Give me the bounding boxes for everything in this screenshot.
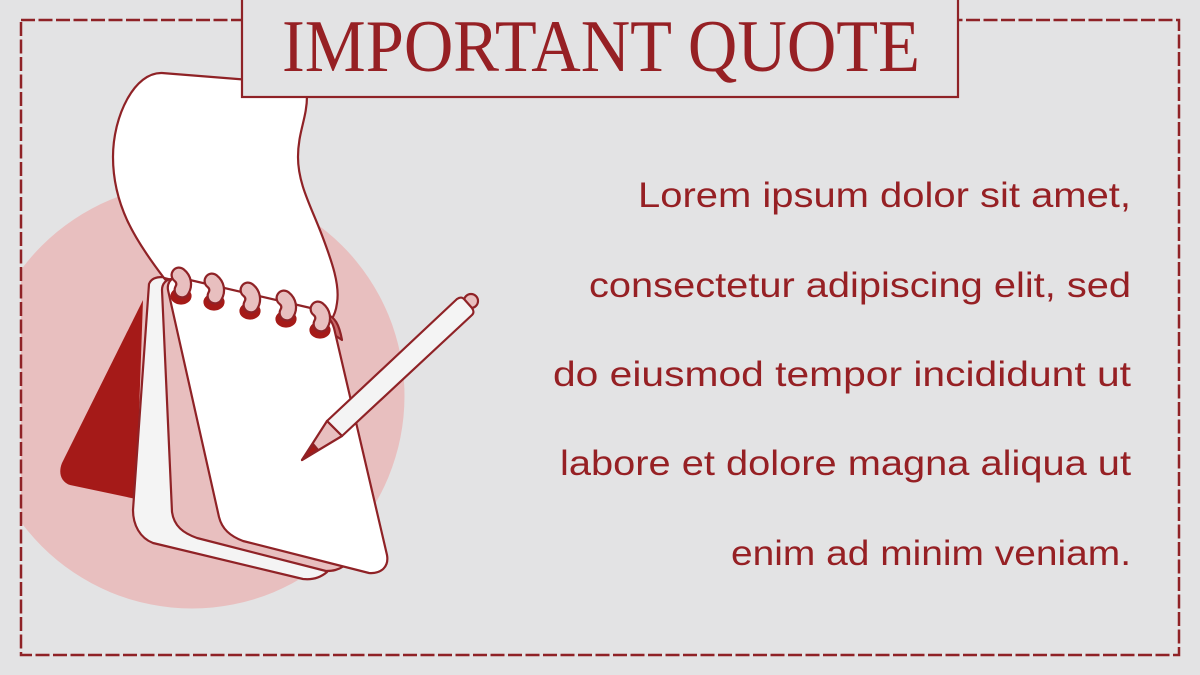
- ring 3: [240, 290, 260, 318]
- quote text: Lorem ipsum dolor sit amet,: [638, 176, 1131, 215]
- flipped page: [113, 73, 338, 320]
- quote text: [553, 176, 1131, 573]
- pink middle page: [162, 279, 344, 571]
- spiral rings: [172, 275, 330, 338]
- light back page: [133, 277, 327, 579]
- ring 5: [310, 309, 330, 338]
- ring 4: [276, 298, 296, 326]
- quote text: labore et dolore magna aliqua ut: [560, 444, 1131, 483]
- ring 2: [204, 281, 224, 310]
- quote text: do eiusmod tempor incididunt ut: [553, 355, 1131, 394]
- dark back cover: [60, 300, 143, 499]
- title box: [242, 0, 958, 97]
- quote text: enim ad minim veniam.: [731, 534, 1131, 573]
- right page edge behind: [326, 314, 342, 340]
- pink background circle: [0, 184, 404, 608]
- ring 1: [172, 275, 190, 304]
- quote text: consectetur adipiscing elit, sed: [589, 266, 1131, 305]
- white front page: [168, 277, 387, 573]
- pencil: [302, 294, 478, 460]
- title: IMPORTANT QUOTE: [282, 6, 920, 88]
- icon: notepad with pencil: [60, 73, 478, 579]
